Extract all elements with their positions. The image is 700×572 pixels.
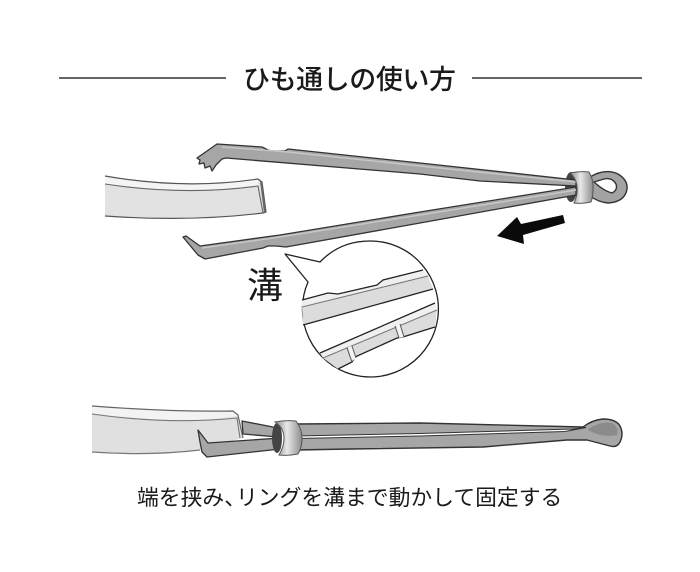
strap end (top illustration) (105, 176, 266, 218)
magnified callout (285, 241, 438, 377)
closed tongs hooked lower arm (198, 430, 280, 457)
sliding ring band (top tongs) (570, 172, 593, 203)
magnified lower band with grooves (320, 303, 437, 369)
magnified upper band (302, 270, 433, 325)
closed tongs short upper arm (242, 421, 278, 437)
strap end (bottom illustration) (92, 406, 243, 454)
sliding ring (bottom tongs) (272, 421, 302, 455)
title: ひも通しの使い方 (243, 65, 456, 95)
caption: 端を挟み、リングを溝まで動かして固定する (137, 485, 562, 510)
closed tongs eyelet highlight (588, 423, 617, 436)
closed tongs centre slit (296, 428, 586, 438)
loop ring and eyelet (top tongs) (565, 172, 627, 203)
arrow: slide ring left (497, 215, 565, 244)
lower tong arm (183, 187, 576, 259)
label: groove: 溝 (247, 265, 283, 306)
closed tongs long arms (296, 419, 622, 450)
upper tong arm (197, 144, 576, 186)
